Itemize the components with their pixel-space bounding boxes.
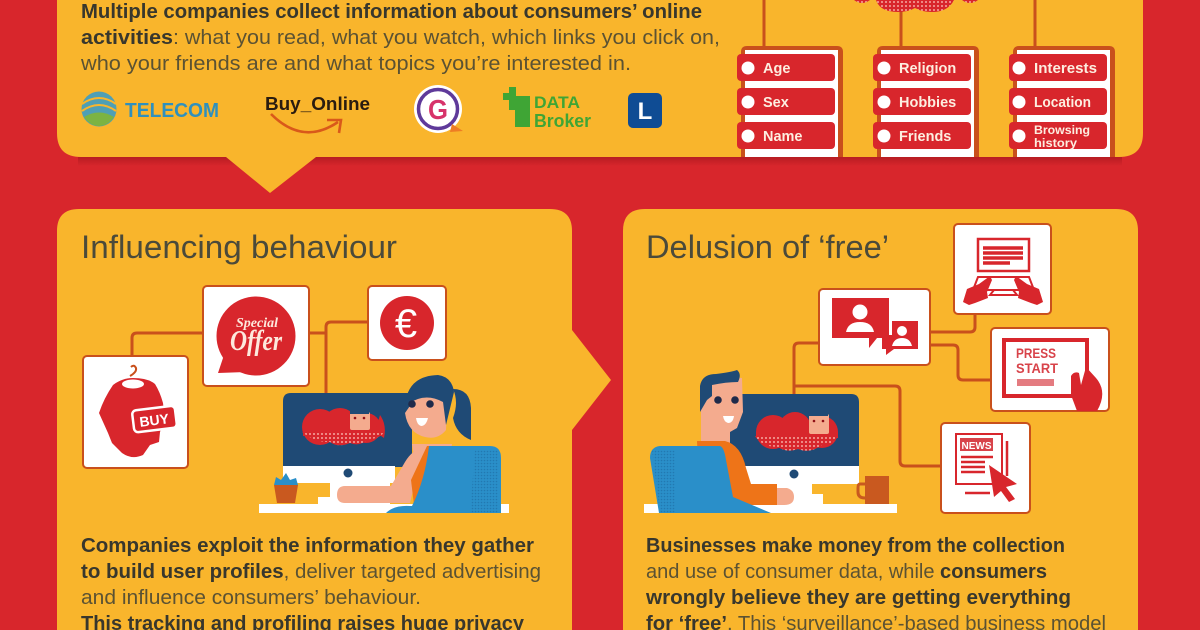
data card: religion hobbies friends: Religion [899, 61, 956, 77]
data card: interests location browsing [1009, 46, 1115, 157]
logo: L [628, 93, 662, 128]
icon: screen cloud [755, 411, 838, 451]
data card: age sex name [737, 46, 843, 157]
text: delusion of free body: Businesses make money from the collection [646, 535, 1065, 557]
icon: laptop [954, 224, 1051, 314]
logo: G chat [414, 85, 463, 133]
data card: interests location browsing: Location [1034, 95, 1091, 111]
logo: telecom: TELECOM [125, 100, 219, 122]
icon: euro [368, 286, 446, 360]
panel: data collection [57, 0, 1143, 193]
text: influencing behaviour body [81, 535, 541, 630]
connector lines [132, 322, 368, 408]
logo: buy online [265, 94, 370, 133]
heading: delusion of free: Delusion of ‘free’ [646, 229, 889, 265]
icon: chat profiles [819, 289, 930, 365]
data card: interests location browsing: history [1034, 136, 1077, 150]
icon: press start tablet: PRESS [1016, 345, 1056, 361]
data card: interests location browsing: Interests [1034, 61, 1097, 77]
text: data collection intro: activities : what you read, what you watch, which links you click on, [81, 27, 720, 49]
icon: buy shirt: BUY [138, 410, 170, 430]
icon: press start tablet: START [1016, 360, 1058, 376]
text: delusion of free body: wrongly believe they are getting everything [645, 587, 1071, 609]
illustration: man at computer [644, 370, 897, 513]
coffee mug [858, 476, 889, 504]
panel: influencing behaviour [57, 209, 611, 630]
text: delusion of free body: and use of consumer data, while consumers [646, 561, 1047, 583]
text: influencing behaviour body: and influence consumers’ behaviour. [81, 587, 421, 609]
text: influencing behaviour body: to build user profiles, deliver targeted advertising [81, 561, 541, 583]
logo: telecom [82, 92, 219, 126]
data card: interests location browsing: Browsing [1034, 123, 1090, 137]
text: influencing behaviour body: Companies exploit the information they gather [81, 535, 534, 557]
icon: press start tablet [991, 328, 1109, 411]
text: data collection intro: who your friends are and what topics you’re interested in. [80, 53, 631, 75]
connector lines [794, 314, 991, 466]
icon: buy shirt [83, 356, 188, 468]
panel: delusion of free [623, 209, 1138, 630]
logo: data broker: DATA [534, 93, 580, 112]
logo: data broker [503, 87, 591, 131]
illustration: woman at computer [259, 375, 509, 513]
icon: euro: € [395, 302, 417, 346]
icon: special offer [203, 286, 309, 386]
icon: news click: NEWS [962, 441, 992, 452]
text: data collection intro: Multiple companies collect information about consumers’ online [81, 1, 702, 23]
logo: buy online: Buy_Online [265, 94, 370, 114]
icon: news click [941, 423, 1030, 513]
data card: age sex name: Name [763, 129, 802, 145]
text: delusion of free body [645, 535, 1106, 630]
icon: special offer: Special [236, 316, 278, 331]
icon: data cloud [764, 0, 1035, 46]
text: data collection intro [80, 1, 720, 75]
data card: religion hobbies friends: Hobbies [899, 95, 956, 111]
icon: screen cloud [302, 408, 385, 445]
logo: data broker: Broker [534, 111, 591, 131]
plant [274, 473, 298, 503]
icon: special offer: Offer [230, 326, 283, 357]
data card: religion hobbies friends [873, 46, 979, 157]
data card: age sex name: Sex [763, 95, 789, 111]
heading: influencing behaviour: Influencing behaviour [81, 229, 397, 265]
logo: G chat: G [428, 94, 448, 125]
data card: religion hobbies friends: Friends [899, 129, 951, 145]
data card: age sex name: Age [763, 61, 790, 77]
logo: L: L [638, 98, 652, 125]
